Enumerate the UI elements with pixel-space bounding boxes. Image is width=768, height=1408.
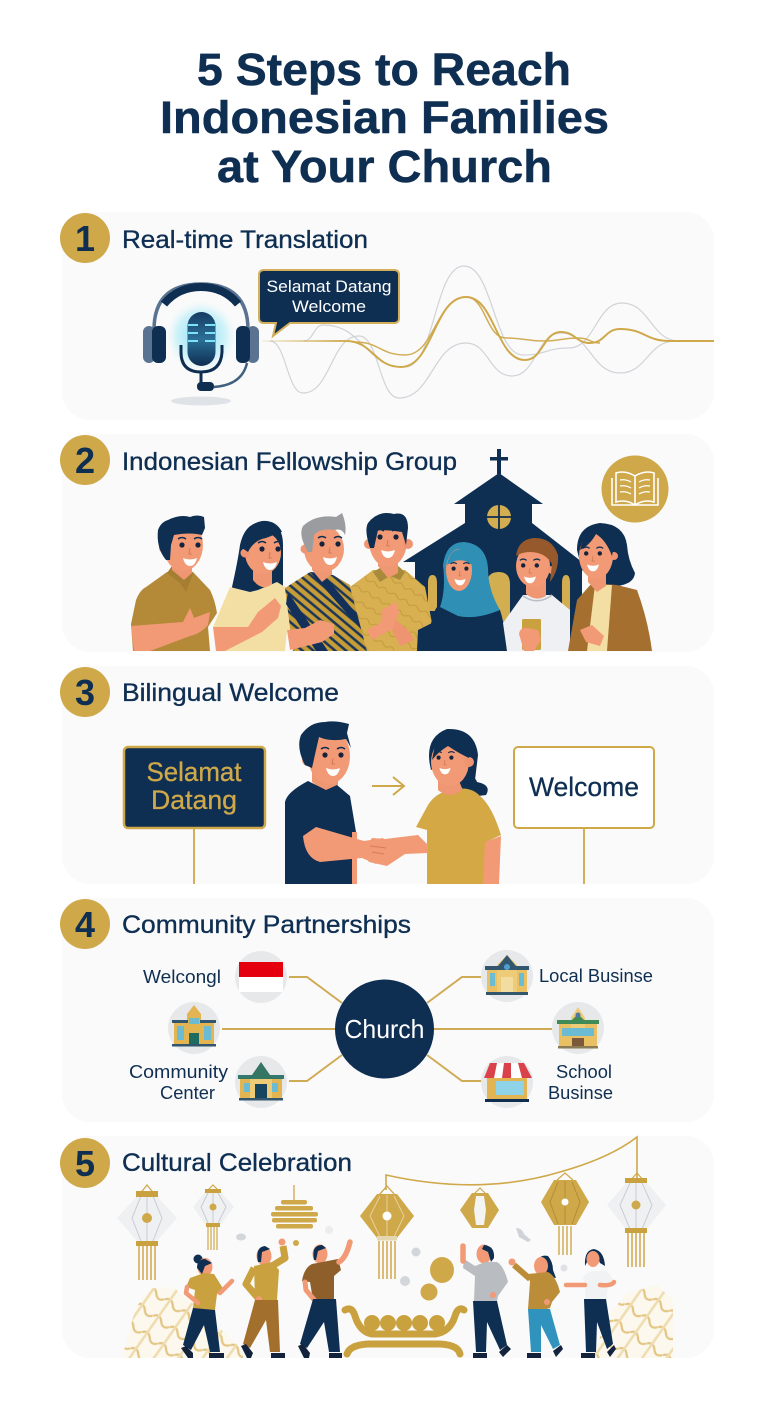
person: dancer blue jeans: [508, 1256, 563, 1358]
person: woman with long hair: [213, 521, 297, 651]
step number 4: [60, 899, 110, 949]
person: dancer white shirt: [566, 1249, 616, 1358]
callout: selamat datang welcome: Selamat Datang: [266, 278, 392, 296]
person: dancer arm raised: [241, 1238, 286, 1358]
person: older man in batik shirt: [285, 513, 367, 651]
title: [160, 44, 609, 192]
node: local business: Local Businse: [539, 965, 653, 986]
hanging string: [386, 1137, 637, 1190]
panel: step 5 cultural celebration: [60, 1136, 714, 1358]
node: welcongl with flag: Welcongl: [143, 966, 221, 987]
person: woman in gold shirt shaking hands: [362, 729, 501, 884]
node: school: [552, 1002, 604, 1054]
node: school business shop: School: [556, 1061, 612, 1082]
sign: welcome: Welcome: [529, 772, 639, 802]
person: man in gold batik shirt: [350, 513, 432, 651]
person: dancer brown shirt: [298, 1242, 350, 1358]
title: 5 Steps to Reach: [197, 44, 571, 95]
step number 5: 5: [75, 1143, 95, 1184]
panel: step 4 community partnerships: [60, 898, 714, 1122]
icon: gold lantern 4: [360, 1186, 414, 1279]
callout: selamat datang welcome: [259, 270, 399, 336]
callout: selamat datang welcome: Welcome: [292, 298, 366, 316]
step number 2: [60, 435, 110, 485]
person: woman in brown cardigan: [568, 523, 652, 651]
icon: gold stacked lantern: [271, 1185, 318, 1228]
heading: bilingual welcome: Bilingual Welcome: [122, 679, 339, 707]
person: dancer with bun: [181, 1254, 232, 1358]
step number 1: 1: [75, 218, 95, 259]
icon: gold lantern 6: [541, 1173, 589, 1255]
icon: white lantern 7: [607, 1173, 666, 1267]
node: welcongl with flag: [143, 951, 287, 1003]
person: man in brown shirt: [131, 516, 217, 651]
arrow: translation direction: [372, 777, 404, 795]
panel: step 2 indonesian fellowship group: [60, 434, 714, 652]
icon: white lantern 2: [193, 1185, 234, 1250]
node: community center: Community: [129, 1061, 229, 1082]
panel: step 3 bilingual welcome: [60, 666, 714, 884]
chart: translation sound waves: [262, 266, 714, 398]
person: man in navy shirt shaking hands: [285, 721, 393, 884]
icon: open book badge: [602, 456, 668, 522]
sign: selamat datang: Datang: [151, 785, 237, 815]
step number 1: [60, 213, 110, 263]
sign: welcome: [514, 747, 654, 884]
node: community center: [129, 1056, 287, 1108]
hub: church: [335, 980, 434, 1078]
batik patches: [122, 1285, 673, 1358]
icon: white lantern 1: [117, 1185, 177, 1280]
step number 4: 4: [75, 904, 95, 945]
heading: cultural celebration: Cultural Celebration: [122, 1149, 352, 1177]
floating confetti dots: [236, 1226, 568, 1300]
heading: indonesian fellowship group: Indonesian Fellowship Group: [122, 448, 457, 476]
connector lines: [222, 977, 552, 1081]
node: local business: [481, 950, 653, 1002]
node: school business shop: [481, 1056, 613, 1108]
sign: selamat datang: Selamat: [146, 757, 242, 787]
heading: real-time translation: Real-time Translation: [122, 226, 368, 254]
icon: church: [403, 449, 582, 651]
panel: step 1 real-time translation: [60, 212, 714, 420]
node: school business shop: Businse: [548, 1082, 613, 1103]
person: dancer grey sweater: [463, 1244, 511, 1358]
title: at Your Church: [217, 141, 552, 192]
icon: gamelan instrument: [345, 1309, 464, 1354]
hub: church: Church: [344, 1014, 424, 1044]
node: community center: Center: [160, 1082, 215, 1103]
person: young woman with cup: [503, 538, 570, 651]
title: Indonesian Families: [160, 92, 609, 143]
heading: community partnerships: Community Partnerships: [122, 911, 411, 939]
sign: selamat datang: [124, 747, 265, 884]
step number 3: [60, 667, 110, 717]
step number 3: 3: [75, 672, 95, 713]
icon: headset microphone: [143, 284, 259, 406]
icon: gold lantern 5: [460, 1188, 499, 1228]
person: woman in blue hijab: [428, 542, 507, 651]
step number 5: [60, 1138, 110, 1188]
step number 2: 2: [75, 440, 95, 481]
node: school building: [168, 1002, 220, 1054]
